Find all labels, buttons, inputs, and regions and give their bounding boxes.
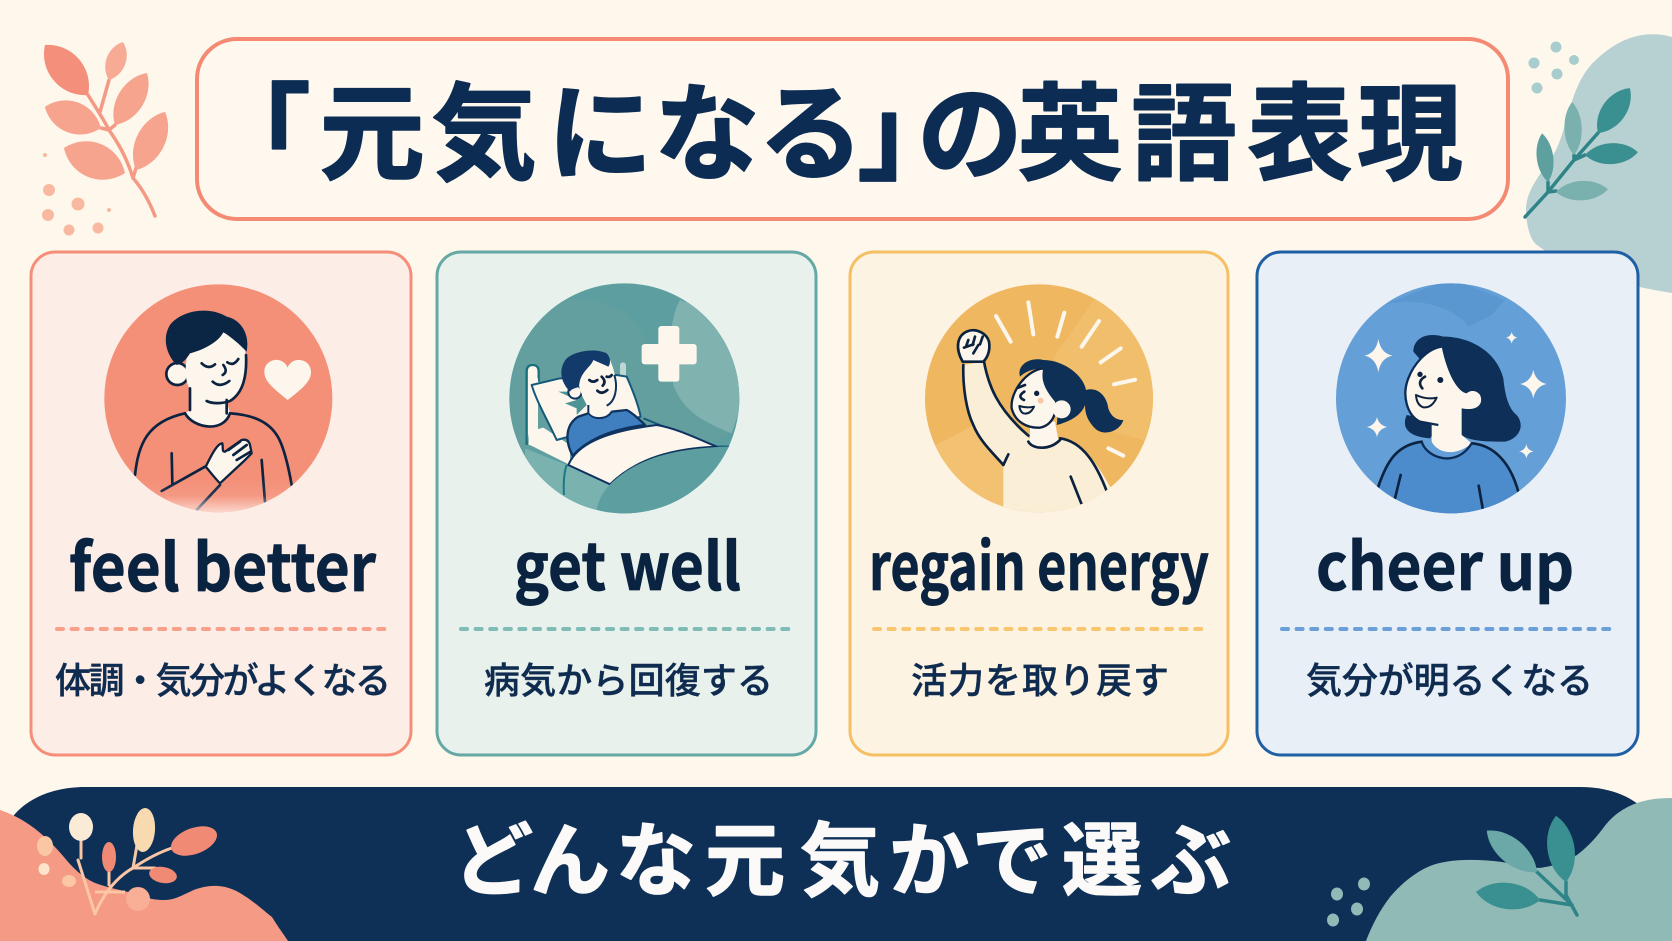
panel: cheer up xyxy=(1257,252,1638,755)
icon: sparkles xyxy=(1364,332,1547,459)
title panel xyxy=(197,39,1508,219)
decorative dots: top left xyxy=(42,153,111,236)
divider: get well xyxy=(461,627,794,631)
panel: regain energy xyxy=(850,252,1228,755)
phrase: feel better: feel better xyxy=(69,516,377,610)
banner message: どんな元気かで選ぶ xyxy=(453,797,1231,913)
divider: cheer up xyxy=(1282,627,1616,631)
phrase: cheer up: cheer up xyxy=(1316,515,1574,609)
meaning: feel better: 体調・気分がよくなる xyxy=(55,652,391,704)
divider: regain energy xyxy=(874,627,1206,631)
illustration: person raising fist xyxy=(923,284,1160,515)
illustration: person resting in bed xyxy=(509,283,750,515)
leaf sprig: top right teal xyxy=(1525,81,1640,217)
icon: medical cross xyxy=(642,326,697,382)
plant: bottom right xyxy=(1474,814,1579,915)
panel: get well xyxy=(437,252,816,755)
illustration: person with hand on heart xyxy=(103,284,337,513)
title text: 「元気になる」の英語表現 xyxy=(205,50,1463,202)
background blob: bottom left coral xyxy=(0,810,288,941)
decorative dots: bottom right xyxy=(1327,878,1370,926)
phrase: regain energy: regain energy xyxy=(869,515,1209,609)
phrase: get well: get well xyxy=(514,515,741,609)
meaning: cheer up: 気分が明るくなる xyxy=(1306,652,1593,704)
background blob: bottom right teal xyxy=(1366,798,1672,941)
illustration: smiling person with sparkles xyxy=(1336,278,1566,518)
plant: bottom left xyxy=(37,807,221,914)
decorative dots: top right xyxy=(1528,42,1579,94)
leaf sprig: top left coral xyxy=(32,34,178,216)
divider: feel better xyxy=(57,627,388,631)
panel: feel better xyxy=(31,252,411,755)
meaning: regain energy: 活力を取り戻す xyxy=(911,652,1169,704)
icon: energy rays xyxy=(996,302,1135,456)
background blob: top right xyxy=(1526,34,1672,293)
bottom banner xyxy=(5,787,1650,941)
meaning: get well: 病気から回復する xyxy=(484,652,773,704)
